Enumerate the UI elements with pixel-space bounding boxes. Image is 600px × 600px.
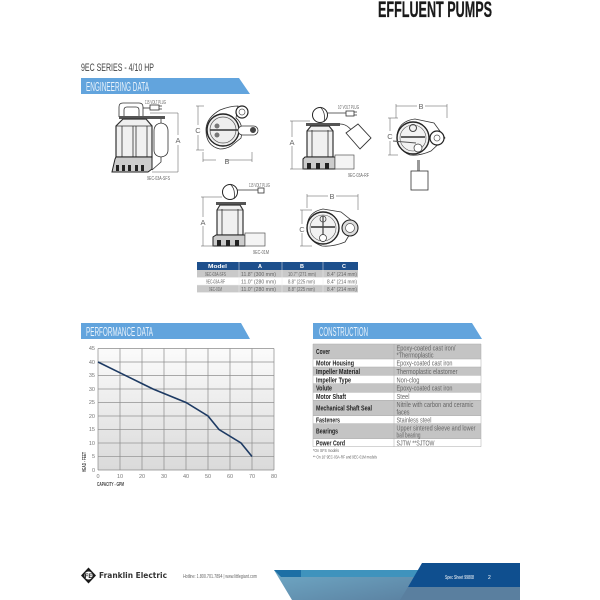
table: pump dimensions: 8.4" (214 mm) [327, 280, 357, 286]
table: pump dimensions: B [300, 264, 304, 270]
table: construction materials: Nitrile with carbon and ceramic [396, 400, 474, 409]
diagram: pump 9EC-03A-SFS top view: B [224, 157, 230, 166]
footnotes: ** On 10' 9EC-03A-RF and 9EC-01M models [313, 454, 378, 460]
chart: performance curve: HEAD - FEET [82, 452, 88, 472]
contact line: Hotline: 1.800.701.7894 | www.littlegiant.com [183, 574, 257, 580]
table: construction materials: Steel [396, 392, 410, 401]
footnotes [313, 448, 378, 460]
chart: performance curve: 35 [89, 373, 95, 379]
chart: performance curve: 20 [89, 414, 95, 420]
table: pump dimensions: 8.8" (225 mm) [288, 280, 315, 286]
table: pump dimensions: 9EC-03A-RF [206, 280, 225, 286]
chart: performance curve: 20 [139, 474, 145, 480]
table: construction materials: Motor Housing [316, 358, 354, 368]
table: pump dimensions [197, 262, 358, 293]
diagram: pump 9EC-03A-RF side view [289, 105, 371, 179]
table: pump dimensions: 8.4" (214 mm) [327, 272, 357, 278]
chart: performance curve: 80 [271, 474, 277, 480]
table: construction materials: Impeller Type [316, 375, 351, 384]
chart: performance curve: 40 [89, 360, 95, 366]
table: construction materials: Epoxy-coated cast iron/ [396, 344, 456, 352]
diagram: pump 9EC-03A-SFS top view [195, 106, 258, 166]
icon: Franklin Electric logo: Franklin Electric [99, 571, 167, 580]
diagram: pump 9EC-01M side view: 115 VOLT PLUG [249, 183, 270, 189]
diagram: pump 9EC-03A-SFS side view [112, 100, 181, 182]
table: pump dimensions: 9EC-03A-SFS [205, 272, 226, 278]
table: construction materials: Volute [316, 384, 332, 393]
diagram: pump 9EC-03A-SFS side view: 115 VOLT PLUG [145, 100, 166, 106]
chart: performance curve: 30 [161, 474, 167, 480]
chart: performance curve: 0 [96, 474, 100, 480]
diagram: pump 9EC-01M top view: B [329, 192, 335, 201]
diagram: pump 9EC-01M side view [200, 183, 270, 256]
table: construction materials: Upper sintered sleeve and lower [396, 423, 476, 432]
diagram: pump 9EC-01M side view: 9EC-01M [253, 250, 269, 256]
diagram: pump 9EC-03A-SFS side view: 9EC-03A-SFS [147, 176, 170, 182]
chart: performance curve: 70 [249, 474, 255, 480]
table: construction materials: Motor Shaft [316, 392, 346, 401]
icon: Franklin Electric logo: FE [85, 574, 92, 580]
panel: performance data banner: PERFORMANCE DATA [86, 325, 153, 339]
table: pump dimensions: C [342, 264, 346, 270]
diagram: pump 9EC-03A-RF top view [387, 102, 447, 190]
table: pump dimensions: 9EC-01M [209, 287, 222, 293]
table: construction materials: Power Cord [316, 438, 345, 447]
table: pump dimensions: 8.8" (225 mm) [288, 287, 315, 293]
chart: performance curve: 10 [89, 441, 95, 447]
table: construction materials: Stainless steel [396, 415, 432, 424]
footer: blue graphic: 2 [488, 575, 491, 581]
table: construction materials: Bearings [316, 426, 338, 436]
table: construction materials: Mechanical Shaft Seal [316, 404, 372, 412]
panel: construction banner: CONSTRUCTION [319, 325, 368, 339]
table: pump dimensions: 10.7" (271 mm) [288, 272, 316, 278]
chart: performance curve: 15 [89, 427, 95, 433]
panel: construction banner [313, 323, 482, 339]
diagram: pump 9EC-01M top view: C [299, 225, 305, 234]
panel: engineering data banner [81, 78, 250, 94]
table: construction materials: *Thermoplastic [396, 350, 434, 360]
table: pump dimensions: 11.8" (300 mm) [241, 272, 276, 278]
diagram: pump 9EC-03A-SFS side view: A [175, 136, 181, 145]
chart: performance curve: 45 [89, 346, 95, 352]
table: construction materials: ball bearing [396, 430, 420, 440]
diagram: pump 9EC-03A-RF side view: 10' VOLT PLUG [338, 105, 359, 111]
table: construction materials: Epoxy-coated cast iron [396, 358, 452, 368]
panel: engineering data banner: ENGINEERING DATA [86, 80, 149, 94]
table: construction materials: Impeller Material [316, 367, 360, 376]
series heading: 9EC SERIES - 4/10 HP [81, 62, 154, 74]
table: pump dimensions: 11.0" (280 mm) [241, 287, 276, 293]
table: pump dimensions: 11.0" (280 mm) [241, 280, 276, 286]
chart: performance curve: 10 [117, 474, 123, 480]
diagram: pump 9EC-03A-RF side view: A [289, 138, 295, 147]
table: construction materials [313, 344, 481, 447]
chart: performance curve: 50 [205, 474, 211, 480]
table: construction materials: Fasteners [316, 415, 340, 424]
chart: performance curve: 5 [92, 454, 95, 460]
table: pump dimensions: A [258, 264, 262, 270]
icon: Franklin Electric logo [81, 568, 167, 584]
chart: performance curve: 0 [92, 468, 95, 474]
diagram: pump 9EC-03A-RF side view: 9EC-03A-RF [348, 173, 369, 179]
chart: performance curve [82, 346, 277, 488]
table: construction materials: Cover [316, 347, 330, 356]
chart: performance curve: 40 [183, 474, 189, 480]
table: construction materials: Non-clog [396, 375, 420, 384]
table: construction materials: Thermoplastic elastomer [396, 367, 458, 376]
table: construction materials: faces [396, 407, 410, 416]
table: construction materials: Epoxy-coated cast iron [396, 384, 452, 393]
chart: performance curve: 25 [89, 400, 95, 406]
chart: performance curve: 30 [89, 387, 95, 393]
table: pump dimensions: 8.4" (214 mm) [327, 287, 357, 293]
table: pump dimensions: Model [208, 264, 228, 270]
diagram: pump 9EC-03A-SFS top view: C [195, 126, 201, 135]
panel: performance data banner [81, 323, 250, 339]
footnotes: *On SFS models [313, 448, 340, 453]
chart: performance curve: 60 [227, 474, 233, 480]
table: construction materials: SJTW **SJTOW [396, 438, 435, 447]
diagram: pump 9EC-01M top view [299, 192, 358, 246]
diagram: pump 9EC-01M side view: A [200, 218, 206, 227]
chart: performance curve: CAPACITY - GPM [97, 482, 124, 488]
diagram: pump 9EC-03A-RF top view: C [387, 132, 393, 141]
footer: blue graphic [274, 563, 520, 600]
footer: blue graphic: Spec Sheet 99808 [445, 575, 474, 581]
diagram: pump 9EC-03A-RF top view: B [418, 102, 424, 111]
